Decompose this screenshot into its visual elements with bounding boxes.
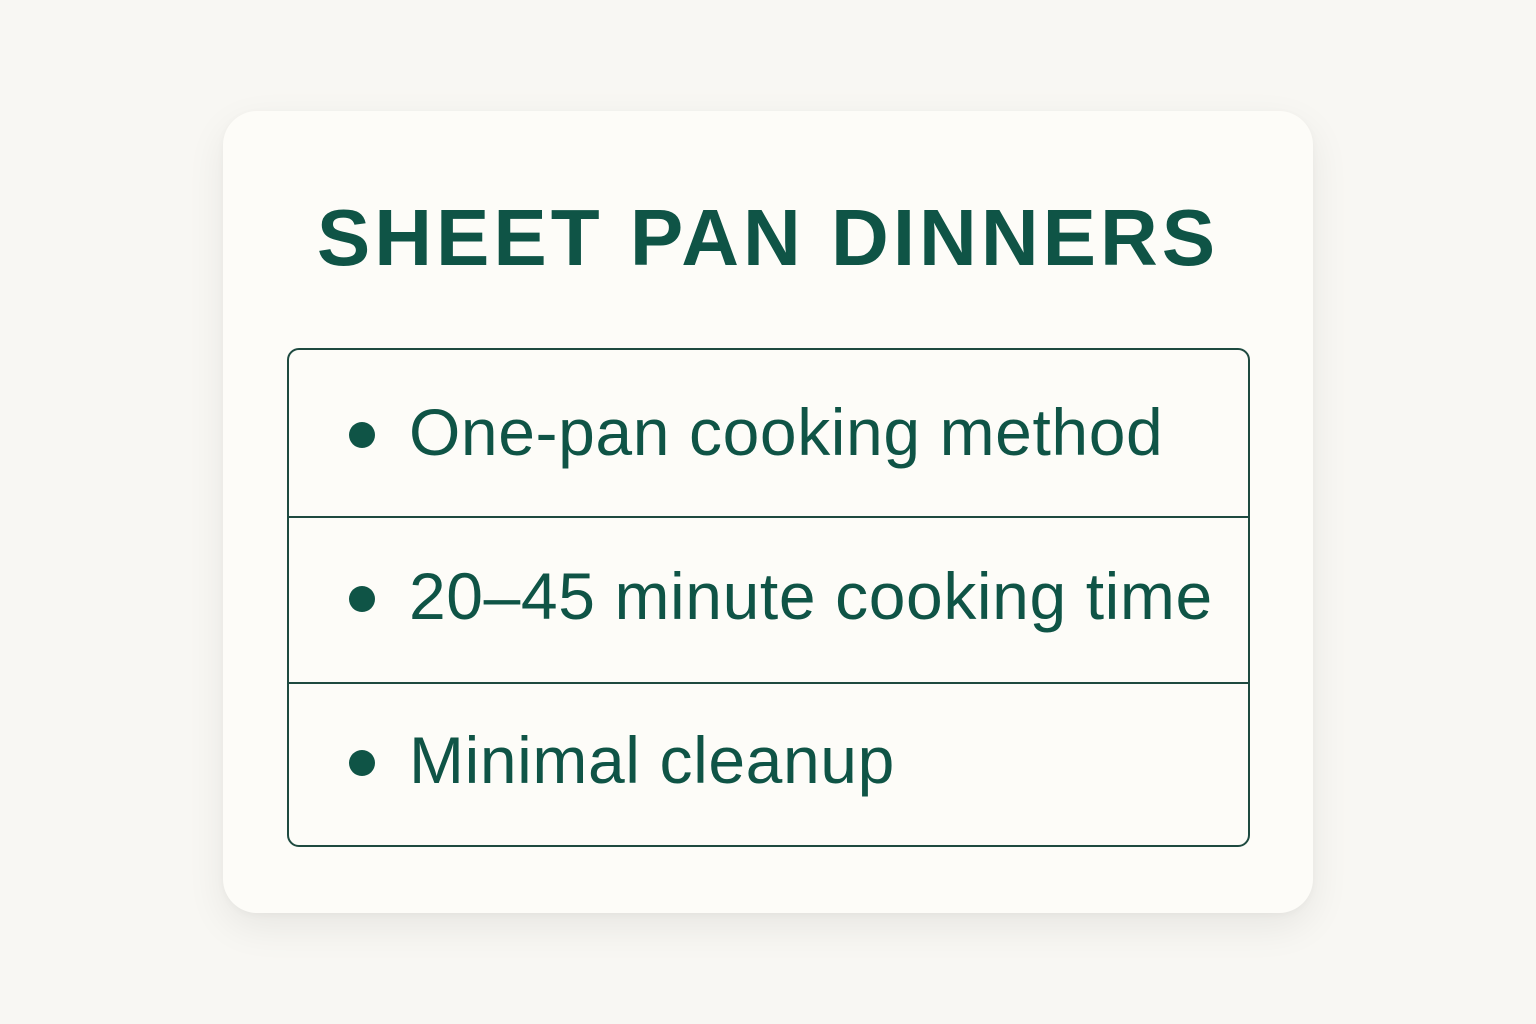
row: one-pan <box>289 350 1248 518</box>
row: cooking time: 20–45 minute cooking time <box>409 559 1213 633</box>
title: SHEET PAN DINNERS <box>317 193 1219 282</box>
card panel <box>223 111 1313 913</box>
row: cleanup: Minimal cleanup <box>409 723 895 797</box>
row: one-pan: One-pan cooking method <box>409 395 1163 469</box>
feature list table <box>287 348 1250 847</box>
row: cooking time <box>289 516 1248 684</box>
